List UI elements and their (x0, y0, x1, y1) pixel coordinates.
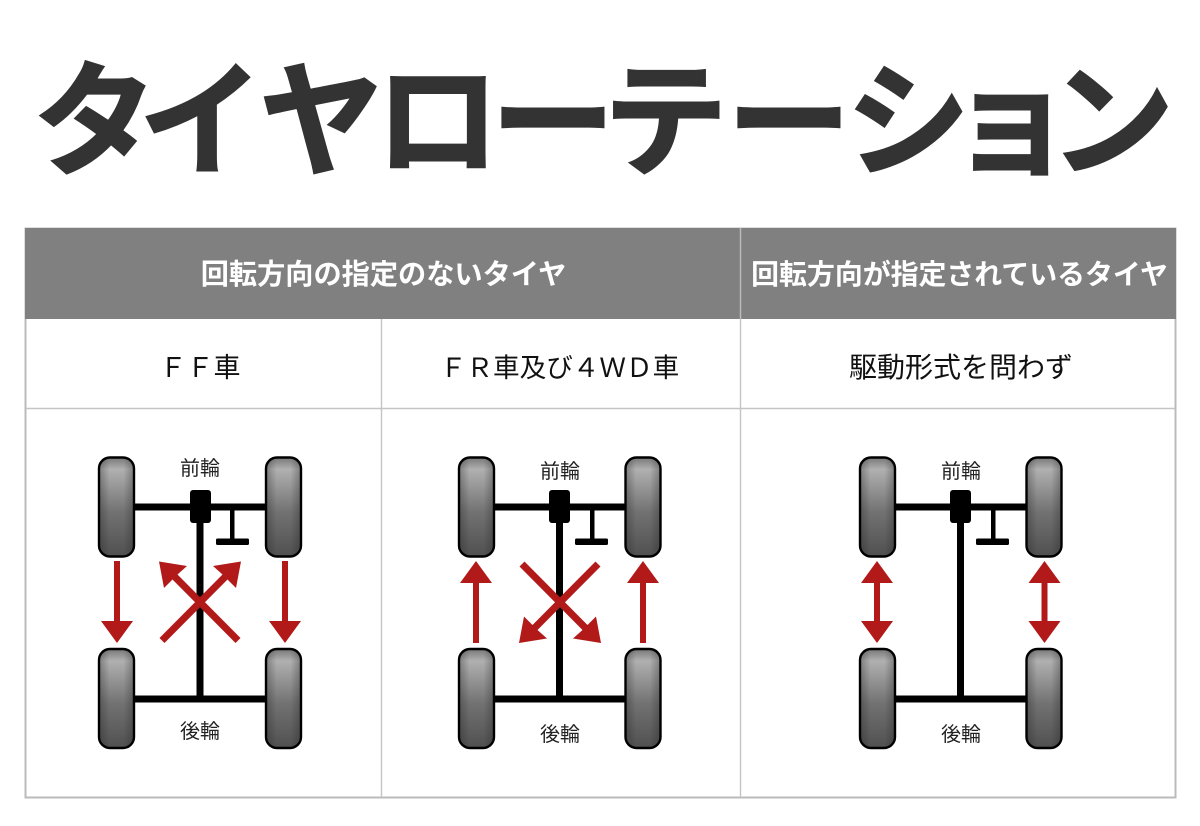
header band (25, 228, 1176, 319)
rotation arrows (861, 561, 1060, 643)
chassis (895, 490, 1027, 702)
chassis (134, 490, 266, 702)
chassis (494, 490, 626, 702)
front label: 前輪 (540, 460, 580, 483)
diagram: FF (99, 457, 301, 748)
rotation arrows (101, 561, 301, 643)
column label: any drive: 駆動形式を問わず (849, 352, 1073, 383)
title: タイヤローテーション (33, 21, 1174, 201)
diagram: FR and 4WD (459, 458, 660, 748)
rear label: 後輪 (180, 720, 220, 743)
header: no rotation direction: 回転方向の指定のないタイヤ (201, 258, 566, 290)
table (25, 228, 1176, 798)
front label: 前輪 (180, 457, 220, 480)
front label: 前輪 (941, 460, 981, 483)
tires (860, 458, 1062, 748)
column label: FR and 4WD: ＦＲ車及び４ＷＤ車 (440, 353, 679, 383)
rotation arrows (460, 561, 659, 643)
rear label: 後輪 (941, 723, 981, 746)
header: rotation direction specified: 回転方向が指定されているタイヤ (751, 258, 1168, 290)
diagram: any drive (860, 458, 1062, 748)
tires (459, 458, 660, 748)
rear label: 後輪 (540, 723, 580, 746)
column label: FF: ＦＦ車 (160, 353, 240, 383)
tires (99, 458, 301, 748)
